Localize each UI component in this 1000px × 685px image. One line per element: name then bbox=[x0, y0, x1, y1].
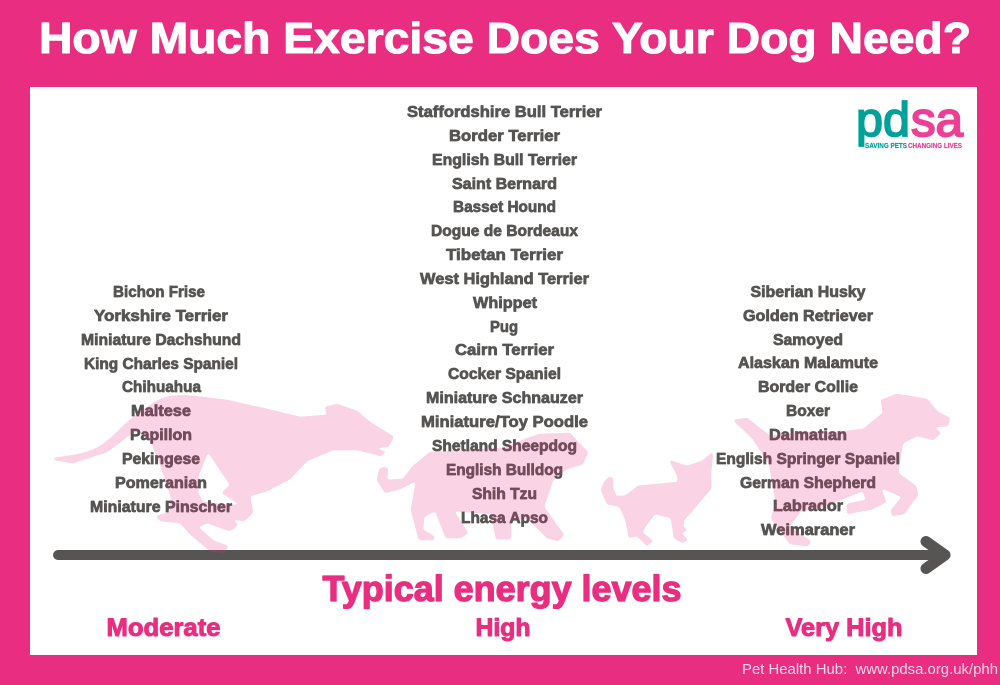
breed list: moderate energy: King Charles Spaniel bbox=[84, 356, 238, 373]
breed list: high energy: Cairn Terrier bbox=[455, 342, 554, 359]
breed list: very high energy bbox=[716, 284, 900, 539]
breed list: very high energy: Boxer bbox=[786, 403, 830, 420]
breed list: moderate energy: Maltese bbox=[131, 403, 191, 420]
breed list: high energy: Shetland Sheepdog bbox=[432, 438, 577, 455]
breed list: very high energy: Alaskan Malamute bbox=[738, 355, 878, 372]
logo: pdsa: SAVING PETS bbox=[865, 143, 907, 150]
breed list: high energy: Pug bbox=[490, 319, 518, 336]
breed list: high energy bbox=[407, 104, 602, 527]
breed list: very high energy: Border Collie bbox=[758, 379, 858, 396]
breed list: high energy: Whippet bbox=[473, 295, 538, 312]
heading: typical energy levels: Typical energy levels bbox=[322, 568, 682, 609]
logo: pdsa: CHANGING LIVES bbox=[908, 143, 962, 150]
breed list: high energy: Border Terrier bbox=[449, 128, 560, 145]
breed list: high energy: Saint Bernard bbox=[452, 176, 557, 193]
breed list: moderate energy: Pomeranian bbox=[115, 475, 207, 492]
footer link: Pet Health Hub: www.pdsa.org.uk/phh bbox=[742, 661, 998, 678]
breed list: moderate energy: Pekingese bbox=[122, 451, 200, 468]
label: moderate: Moderate bbox=[106, 614, 221, 642]
breed list: high energy: Shih Tzu bbox=[472, 486, 537, 503]
breed list: moderate energy: Chihuahua bbox=[122, 379, 201, 396]
breed list: high energy: Cocker Spaniel bbox=[448, 366, 561, 383]
icon: running greyhound silhouette bbox=[54, 395, 394, 553]
breed list: high energy: Staffordshire Bull Terrier bbox=[407, 104, 602, 121]
breed list: high energy: West Highland Terrier bbox=[420, 271, 589, 288]
breed list: high energy: Tibetan Terrier bbox=[446, 247, 563, 264]
breed list: very high energy: Samoyed bbox=[773, 332, 843, 349]
icon: chihuahua silhouette bbox=[601, 452, 713, 546]
label: very high: Very High bbox=[786, 614, 902, 642]
logo: pdsa: sa bbox=[911, 94, 963, 147]
breed list: moderate energy: Papillon bbox=[130, 427, 192, 444]
breed list: high energy: Dogue de Bordeaux bbox=[431, 223, 578, 240]
breed list: very high energy: English Springer Spaniel bbox=[716, 451, 900, 468]
breed list: moderate energy: Bichon Frise bbox=[113, 284, 205, 301]
breed list: high energy: Miniature/Toy Poodle bbox=[421, 414, 588, 431]
logo: pdsa: pd bbox=[856, 94, 910, 147]
breed list: moderate energy: Miniature Dachshund bbox=[81, 332, 241, 349]
breed list: high energy: Miniature Schnauzer bbox=[426, 390, 583, 407]
breed list: very high energy: Labrador bbox=[773, 498, 843, 515]
breed list: high energy: English Bull Terrier bbox=[432, 152, 577, 169]
breed list: very high energy: German Shepherd bbox=[740, 475, 876, 492]
breed list: moderate energy: Yorkshire Terrier bbox=[94, 308, 228, 325]
breed list: very high energy: Weimaraner bbox=[761, 522, 855, 539]
icon: leaping dog silhouette bbox=[733, 394, 950, 546]
breed list: high energy: English Bulldog bbox=[446, 462, 563, 479]
panel: white content area bbox=[30, 87, 977, 655]
icon: fluffy dog silhouette bbox=[377, 433, 588, 541]
breed list: moderate energy: Miniature Pinscher bbox=[90, 499, 232, 516]
breed list: very high energy: Siberian Husky bbox=[750, 284, 866, 301]
breed list: high energy: Lhasa Apso bbox=[461, 510, 548, 527]
logo: pdsa bbox=[856, 94, 963, 150]
title: How Much Exercise Does Your Dog Need? bbox=[39, 14, 971, 63]
breed list: very high energy: Golden Retriever bbox=[743, 308, 873, 325]
breed list: high energy: Basset Hound bbox=[453, 199, 556, 216]
breed list: moderate energy bbox=[81, 284, 241, 516]
label: high: High bbox=[476, 614, 530, 642]
breed list: very high energy: Dalmatian bbox=[769, 427, 847, 444]
arrow: energy scale bbox=[58, 542, 945, 568]
